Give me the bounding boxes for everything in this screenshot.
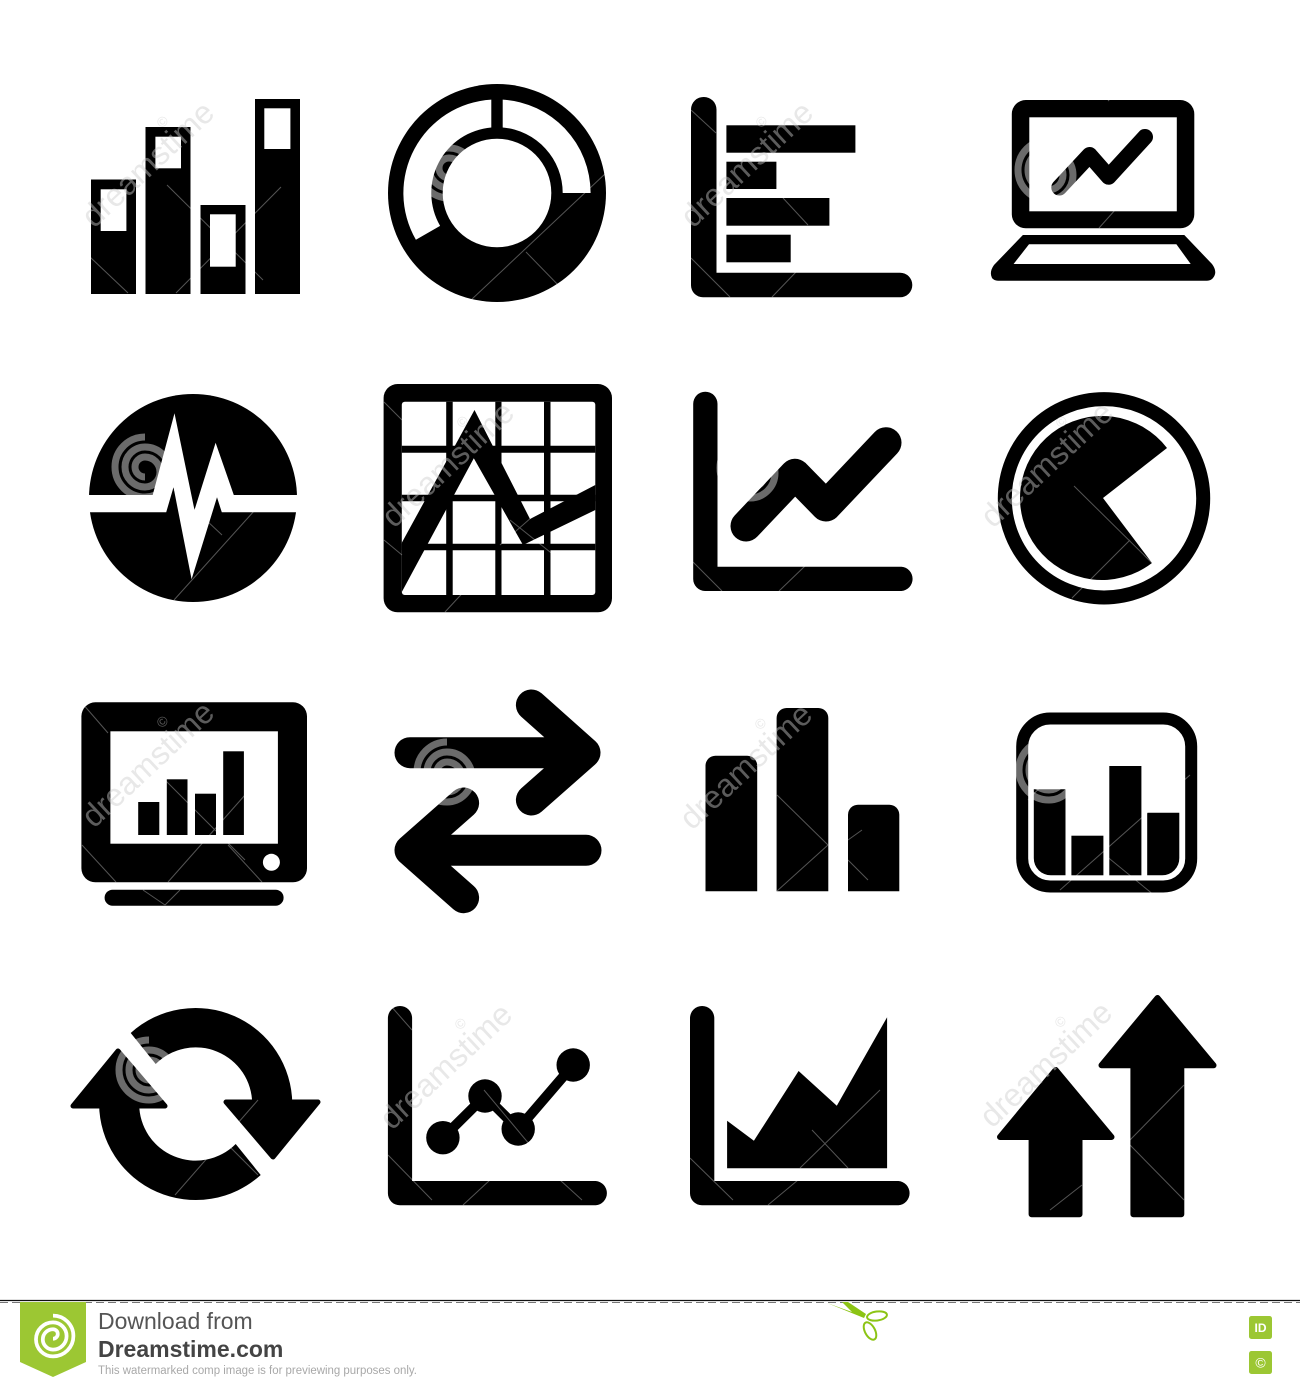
icon: swap arrows bbox=[410, 705, 586, 898]
icon: refresh cycle arrows bbox=[73, 1008, 318, 1200]
footer text: download from: Download from bbox=[98, 1308, 253, 1334]
watermark: dreamstime diagonal text: © bbox=[751, 714, 770, 733]
watermark: dreamstime diagonal text: © bbox=[153, 112, 172, 131]
icon: horizontal bar chart bbox=[691, 97, 912, 297]
icon: rounded square bar chart bbox=[1022, 718, 1191, 886]
icon: green scissors bbox=[827, 1302, 888, 1342]
watermark: dreamstime diagonal text: dreamstime bbox=[74, 94, 221, 234]
icon: pie chart with ring bbox=[1005, 399, 1203, 598]
watermark: dreamstime diagonal text: dreamstime bbox=[673, 94, 820, 234]
footer text: dreamstime.com: Dreamstime.com bbox=[98, 1336, 283, 1362]
watermark: dreamstime diagonal text: © bbox=[451, 1014, 470, 1033]
watermark: dreamstime diagonal text: © bbox=[1051, 1012, 1070, 1031]
badge: copyright bbox=[1249, 1351, 1272, 1374]
watermark: dreamstime diagonal text: dreamstime bbox=[672, 696, 819, 836]
watermark: dreamstime diagonal text bbox=[67, 86, 1120, 1136]
icon: three rounded bars bbox=[706, 708, 899, 891]
watermark: spirals bbox=[115, 138, 1074, 1100]
icon: grid line chart bbox=[384, 384, 612, 612]
watermark: dreamstime diagonal text: dreamstime bbox=[972, 994, 1119, 1134]
watermark: diagonal lines bbox=[82, 85, 1190, 1210]
badge: ID bbox=[1249, 1316, 1272, 1339]
badge: ID: ID bbox=[1254, 1321, 1267, 1335]
watermark: dreamstime diagonal text: dreamstime bbox=[374, 394, 521, 534]
watermark: dreamstime diagonal text: © bbox=[1052, 412, 1071, 431]
watermark: dreamstime diagonal text: © bbox=[752, 112, 771, 131]
icon: line chart bbox=[693, 392, 913, 591]
icon: area chart bbox=[690, 1006, 910, 1205]
icon: bar chart with window cutouts bbox=[91, 99, 300, 294]
icon: monitor with bars bbox=[81, 702, 307, 906]
icon: dotted line chart bbox=[388, 1006, 607, 1205]
icon: two up arrows bbox=[1000, 998, 1214, 1214]
icon: donut gauge bbox=[388, 84, 606, 302]
watermark: dreamstime diagonal text: © bbox=[453, 412, 472, 431]
icon: laptop with trend line bbox=[991, 100, 1215, 281]
icon: pulse circle bbox=[85, 394, 301, 602]
watermark: dreamstime diagonal text: dreamstime bbox=[973, 394, 1120, 534]
badge: copyright: © bbox=[1255, 1354, 1266, 1370]
watermark: dreamstime diagonal text: © bbox=[153, 712, 172, 731]
footer text: preview disclaimer: This watermarked comp image is for previewing purposes only. bbox=[98, 1365, 417, 1377]
logo: green ribbon with spiral bbox=[20, 1302, 86, 1377]
watermark: dreamstime diagonal text: dreamstime bbox=[74, 694, 221, 834]
watermark: dreamstime diagonal text: dreamstime bbox=[372, 996, 519, 1136]
